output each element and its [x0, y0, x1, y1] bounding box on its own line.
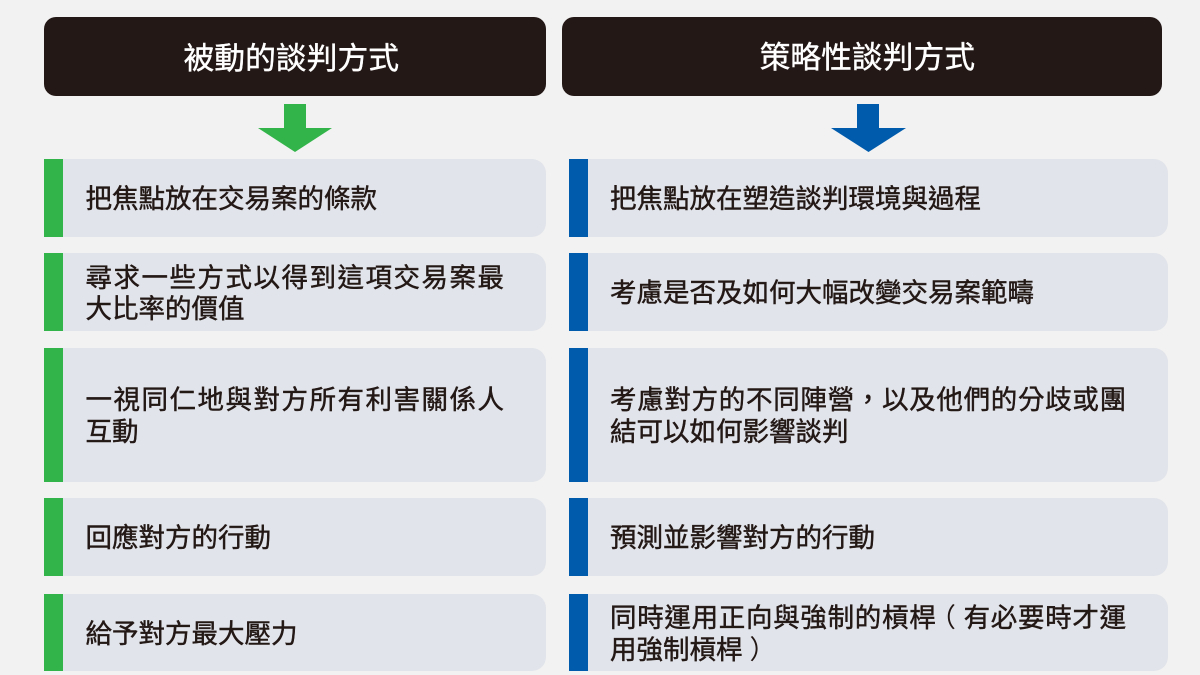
right row 3: [569, 348, 1168, 482]
right row 5: 用強制槓桿 ）: [610, 635, 776, 665]
left row 2: 大比率的價值: [86, 294, 244, 324]
left row 3: 一視同仁地與對方所有利害關係人: [86, 385, 506, 415]
left row 3: 互動: [86, 417, 138, 447]
header: passive negotiation: [44, 17, 546, 96]
arrow: blue down: [831, 104, 906, 152]
left row 2: 尋求一些方式以得到這項交易案最: [86, 263, 506, 293]
left row 5: [44, 594, 546, 671]
left row 2: [44, 253, 546, 331]
left row 1: 把焦點放在交易案的條款: [86, 184, 377, 214]
header: strategic negotiation: [562, 17, 1162, 96]
header: strategic negotiation: 策略性談判方式: [760, 40, 975, 75]
arrow: green down: [258, 104, 332, 152]
left row 4: [44, 498, 546, 576]
right row 1: 把焦點放在塑造談判環境與過程: [610, 184, 981, 214]
right row 1: [569, 159, 1168, 237]
left row 1: [44, 159, 546, 237]
right row 4: [569, 498, 1168, 576]
right row 4: 預測並影響對方的行動: [610, 523, 875, 553]
header: passive negotiation: 被動的談判方式: [184, 41, 399, 76]
right row 5: 同時運用正向與強制的槓桿（ 有必要時才運: [610, 603, 1127, 633]
right row 3: 考慮對方的不同陣營，以及他們的分歧或團: [610, 385, 1127, 415]
right row 2: 考慮是否及如何大幅改變交易案範疇: [610, 278, 1034, 308]
right row 2: [569, 253, 1168, 331]
left row 5: 給予對方最大壓力: [86, 619, 298, 649]
left row 3: [44, 348, 546, 482]
left row 4: 回應對方的行動: [86, 523, 271, 553]
right row 3: 結可以如何影響談判: [610, 417, 848, 447]
right row 5: [569, 594, 1168, 671]
